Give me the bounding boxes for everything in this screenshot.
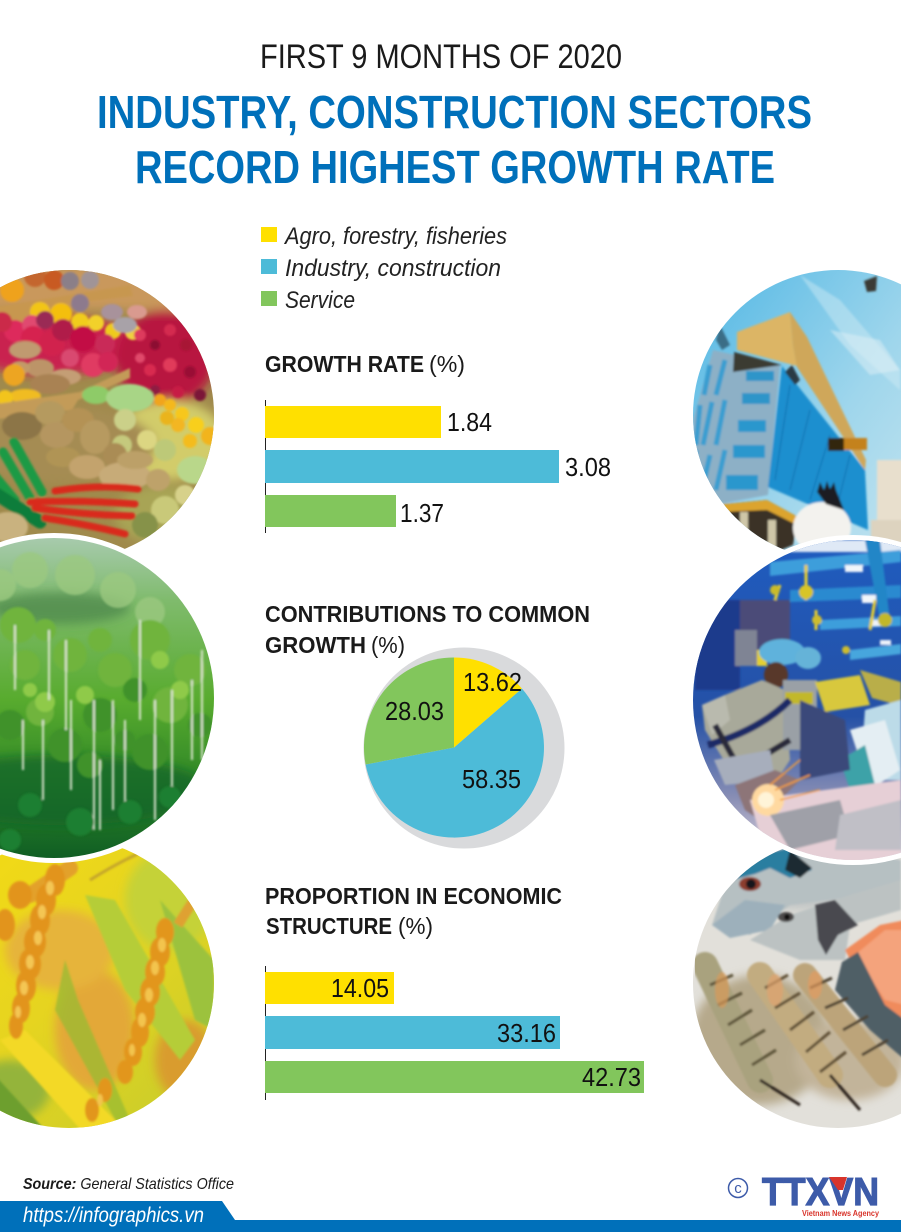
bar: service 1.37 bbox=[265, 495, 444, 528]
logo: TTXVN bbox=[728, 1171, 879, 1218]
footer bar with url tab bbox=[0, 1201, 901, 1232]
bar: industry 33.16: 33.16 bbox=[497, 1018, 556, 1048]
bar: industry 3.08 bbox=[265, 450, 611, 483]
title bbox=[97, 38, 812, 193]
logo: TTXVN: TTXVN bbox=[762, 1171, 879, 1214]
bar: agro 1.84 bbox=[265, 406, 492, 438]
slice: agro 13.62: 13.62 bbox=[463, 667, 522, 697]
logo: TTXVN: c bbox=[734, 1180, 742, 1197]
slice: industry 58.35 bbox=[366, 688, 544, 838]
heading: proportion: STRUCTURE bbox=[266, 913, 392, 939]
photo: fish and shrimp bbox=[690, 835, 901, 1131]
bar: service 1.37: 1.37 bbox=[400, 498, 444, 528]
legend bbox=[261, 223, 507, 314]
bar: agro 14.05 bbox=[265, 972, 394, 1004]
heading: proportion: PROPORTION IN ECONOMIC bbox=[265, 883, 562, 909]
bar: agro 1.84: 1.84 bbox=[447, 407, 492, 437]
photo: tropical forest bbox=[0, 533, 220, 865]
photo: construction building against sky bbox=[690, 268, 901, 568]
heading: contributions bbox=[265, 601, 590, 658]
bar chart: growth rate bbox=[265, 400, 611, 533]
bar: industry 3.08: 3.08 bbox=[565, 452, 611, 482]
logo: TTXVN: Vietnam News Agency bbox=[802, 1208, 879, 1218]
legend: agro: Agro, forestry, fisheries bbox=[283, 223, 507, 250]
photo: rice field bbox=[0, 848, 214, 1128]
overline: period: FIRST 9 MONTHS OF 2020 bbox=[260, 38, 622, 76]
slice: service 28.03: 28.03 bbox=[385, 696, 444, 726]
photo: fruit and vegetable market bbox=[0, 270, 214, 549]
slice: service 28.03 bbox=[364, 657, 454, 764]
headline line 2: RECORD HIGHEST GROWTH RATE bbox=[135, 141, 775, 193]
bar: agro 14.05: 14.05 bbox=[331, 973, 389, 1003]
heading: growth rate: GROWTH RATE bbox=[265, 351, 424, 377]
slice: agro 13.62 bbox=[454, 658, 522, 748]
heading: contributions: GROWTH bbox=[265, 632, 366, 658]
footer bar with url tab: https://infographics.vn bbox=[23, 1204, 204, 1227]
heading: contributions: (%) bbox=[371, 632, 405, 658]
slice: industry 58.35: 58.35 bbox=[462, 764, 521, 794]
legend: service bbox=[261, 287, 355, 314]
legend: service: Service bbox=[285, 287, 355, 314]
pie chart: contributions bbox=[364, 648, 564, 848]
bar: industry 33.16 bbox=[265, 1016, 560, 1049]
bar: service 42.73 bbox=[265, 1061, 644, 1093]
heading: growth rate: (%) bbox=[429, 351, 465, 377]
heading: proportion: (%) bbox=[398, 913, 433, 939]
legend: industry: Industry, construction bbox=[285, 255, 501, 282]
photo: assembly line factory bbox=[688, 535, 901, 870]
bar chart: economic structure bbox=[265, 966, 644, 1100]
heading: contributions: CONTRIBUTIONS TO COMMON bbox=[265, 601, 590, 627]
heading: proportion bbox=[265, 883, 562, 939]
source note: Source: General Statistics Office bbox=[23, 1176, 234, 1193]
bar: service 42.73: 42.73 bbox=[582, 1062, 641, 1092]
